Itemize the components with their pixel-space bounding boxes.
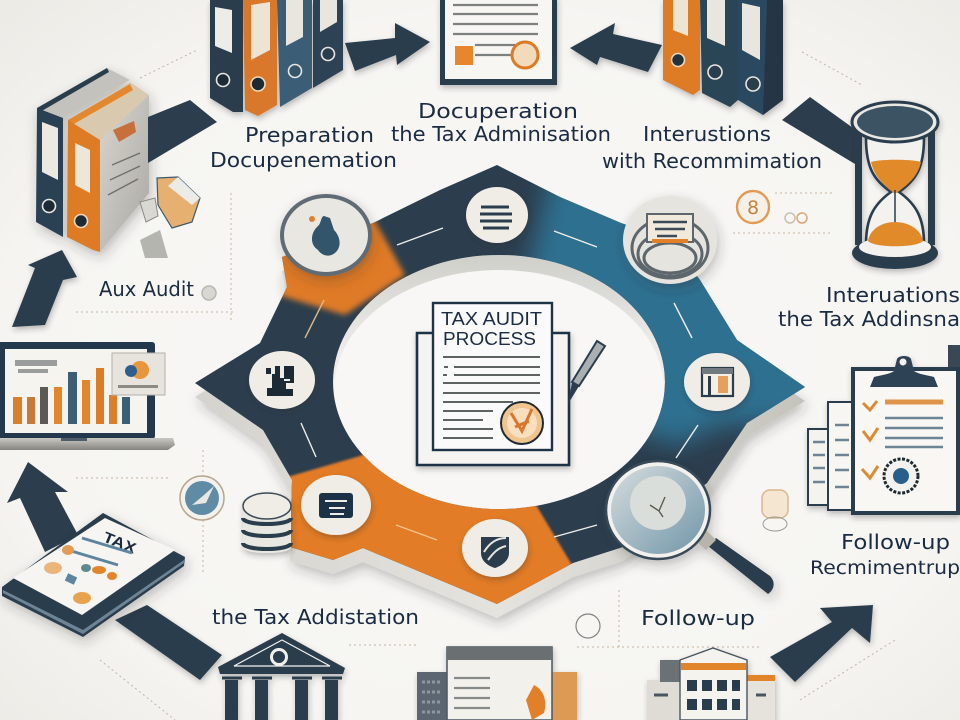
note card — [112, 353, 165, 395]
badge: bottom — [462, 519, 528, 577]
back page near — [828, 402, 854, 510]
document lines — [443, 357, 540, 438]
clipboard board — [853, 369, 958, 513]
document back frame — [417, 333, 569, 465]
decorative dotted trails — [76, 50, 895, 720]
laptop with bar chart — [0, 342, 175, 450]
magnifier — [606, 461, 774, 594]
document title — [441, 309, 542, 349]
pen — [568, 341, 605, 404]
document sheet — [433, 303, 552, 450]
chart title — [15, 360, 57, 373]
tablet with tax — [2, 513, 185, 637]
label: Interustions: Interustions — [643, 122, 771, 146]
arrow: mid-left upward — [7, 462, 78, 552]
arrow: bottom-left upward — [12, 250, 77, 327]
document title: TAX AUDIT — [441, 309, 542, 329]
badge: right — [684, 353, 750, 411]
arrow: top left to document — [345, 23, 430, 71]
ring coloured segments — [195, 165, 805, 604]
document title: PROCESS — [443, 329, 536, 349]
binders: top left — [210, 0, 343, 116]
tablet screen — [13, 518, 175, 615]
gear seal — [884, 459, 918, 493]
document seal — [501, 402, 543, 444]
label: Recmimentrup: Recmimentrup — [810, 557, 960, 579]
document stack: bottom centre — [417, 647, 577, 720]
document: top centre — [440, 0, 557, 85]
small round icon — [180, 476, 224, 520]
ring arrows — [301, 228, 698, 540]
label: with Recommimation: with Recommimation — [602, 149, 822, 173]
binders: top right — [663, 0, 783, 115]
left binders — [36, 68, 149, 252]
coin stack — [243, 493, 291, 553]
central ring diagram — [195, 165, 809, 628]
label: Preparation: Preparation — [245, 123, 374, 147]
arrow: bottom-left to bank — [115, 605, 222, 680]
laptop screen — [0, 342, 155, 439]
crumpled icon — [140, 177, 200, 258]
label: the Tax Adminisation: the Tax Adminisation — [391, 122, 611, 146]
ring inner floor — [334, 270, 664, 510]
back page far — [808, 429, 830, 505]
clipboard group — [808, 356, 958, 513]
document stack: bottom right — [647, 648, 775, 720]
hourglass — [852, 102, 938, 269]
ring side wall — [195, 179, 805, 618]
badge: top — [466, 187, 528, 243]
tablet rows — [44, 538, 132, 604]
badge: glass top-left — [280, 194, 372, 276]
central document — [417, 303, 605, 465]
bar chart — [13, 368, 130, 424]
badge: left — [249, 351, 315, 409]
badge: stacked top-right — [623, 196, 717, 284]
label: Follow-up bottom: Follow-up — [641, 606, 755, 630]
bank building — [218, 633, 345, 720]
tablet body — [2, 513, 185, 637]
clipboard clip — [870, 356, 938, 387]
dark tab top right — [948, 345, 960, 367]
label: Follow-up right: Follow-up — [841, 530, 950, 554]
arrow: behind left binders — [148, 100, 217, 163]
arrow: into hourglass — [782, 97, 860, 167]
label: Interuations: Interuations — [826, 283, 960, 307]
icon: number 8 badge — [737, 191, 769, 223]
small marks — [785, 213, 807, 223]
ring inner wall — [333, 255, 665, 509]
laptop base — [0, 438, 175, 450]
arrow: bottom right upward — [770, 605, 873, 682]
icon: number 8 badge: 8 — [747, 197, 759, 219]
label: Docupenemation: Docupenemation — [210, 148, 397, 172]
label: Aux Audit: Aux Audit — [99, 277, 194, 301]
label: Docuperation: Docuperation — [418, 99, 578, 123]
label: the Tax Addistation: the Tax Addistation — [212, 605, 419, 629]
label: the Tax Addinsna: the Tax Addinsna — [778, 307, 960, 331]
arrow: top right to document — [570, 23, 662, 72]
checklist — [862, 401, 878, 478]
badge: bottom-left — [301, 475, 371, 535]
small faded icons — [202, 286, 788, 638]
tablet title: TAX — [101, 529, 138, 557]
